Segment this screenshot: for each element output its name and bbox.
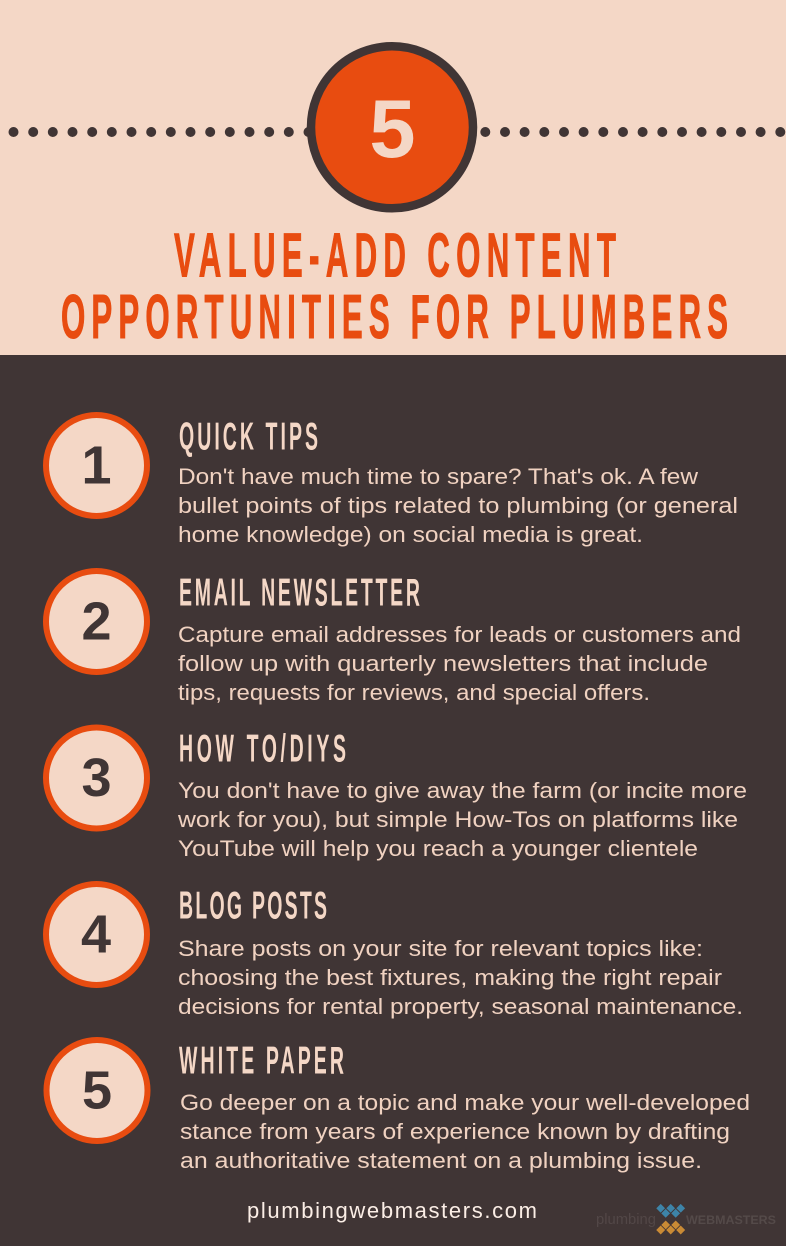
- number badge 2: 2: [81, 592, 112, 652]
- title: VALUE-ADD CONTENT: [174, 221, 616, 290]
- heading 5: WHITE PAPER: [179, 1038, 344, 1082]
- number badge 4: [46, 884, 147, 985]
- number badge 2: [46, 571, 147, 672]
- content panel: [0, 355, 786, 1246]
- body 1: bullet points of tips related to plumbing (or general: [178, 493, 738, 518]
- body 5: stance from years of experience known by drafting: [180, 1119, 730, 1144]
- body 2: [178, 622, 741, 705]
- item 1: quick tips: [46, 414, 738, 547]
- body 3: You don't have to give away the farm (or incite more: [178, 778, 747, 803]
- body 1: Don't have much time to spare? That's ok. A few: [178, 464, 699, 489]
- big number badge: [311, 46, 473, 208]
- logo: [596, 1203, 776, 1235]
- body 3: work for you), but simple How-Tos on platforms like: [177, 807, 738, 832]
- body 3: YouTube will help you reach a younger clientele: [178, 836, 698, 861]
- body 2: follow up with quarterly newsletters that include: [178, 651, 708, 676]
- heading 1: QUICK TIPS: [179, 414, 318, 458]
- number badge 1: 1: [81, 436, 112, 496]
- body 5: an authoritative statement on a plumbing issue.: [180, 1148, 702, 1173]
- number badge 3: 3: [81, 748, 112, 808]
- body 4: decisions for rental property, seasonal maintenance.: [178, 994, 743, 1019]
- logo: WEBMASTERS: [686, 1213, 776, 1227]
- item 5: white paper: [46, 1038, 750, 1173]
- heading 2: EMAIL NEWSLETTER: [179, 570, 420, 614]
- body 4: [178, 936, 743, 1019]
- title: OPPORTUNITIES FOR PLUMBERS: [61, 282, 728, 352]
- body 1: [178, 464, 738, 547]
- body 3: [177, 778, 747, 861]
- body 2: tips, requests for reviews, and special offers.: [178, 680, 650, 705]
- heading 4: BLOG POSTS: [179, 883, 327, 927]
- big number badge: 5: [369, 82, 416, 175]
- body 5: Go deeper on a topic and make your well-developed: [180, 1090, 750, 1115]
- number badge 5: 5: [82, 1060, 112, 1120]
- heading 3: HOW TO/DIYS: [179, 726, 346, 770]
- logo: plumbing: [596, 1212, 656, 1228]
- title: [61, 221, 728, 352]
- body 4: choosing the best fixtures, making the right repair: [178, 965, 723, 990]
- item 4: blog posts: [46, 883, 743, 1019]
- body 4: Share posts on your site for relevant topics like:: [178, 936, 703, 961]
- number badge 1: [46, 415, 147, 516]
- number badge 5: [46, 1040, 148, 1141]
- number badge 3: [46, 728, 147, 828]
- number badge 4: 4: [81, 904, 111, 964]
- item 3: how to/diys: [46, 726, 747, 861]
- header panel: [0, 0, 786, 355]
- footer url: plumbingwebmasters.com: [247, 1198, 537, 1223]
- dotted line: [8, 127, 785, 137]
- body 1: home knowledge) on social media is great.: [178, 522, 643, 547]
- body 2: Capture email addresses for leads or customers and: [178, 622, 741, 647]
- body 5: [180, 1090, 750, 1173]
- item 2: email newsletter: [46, 570, 741, 705]
